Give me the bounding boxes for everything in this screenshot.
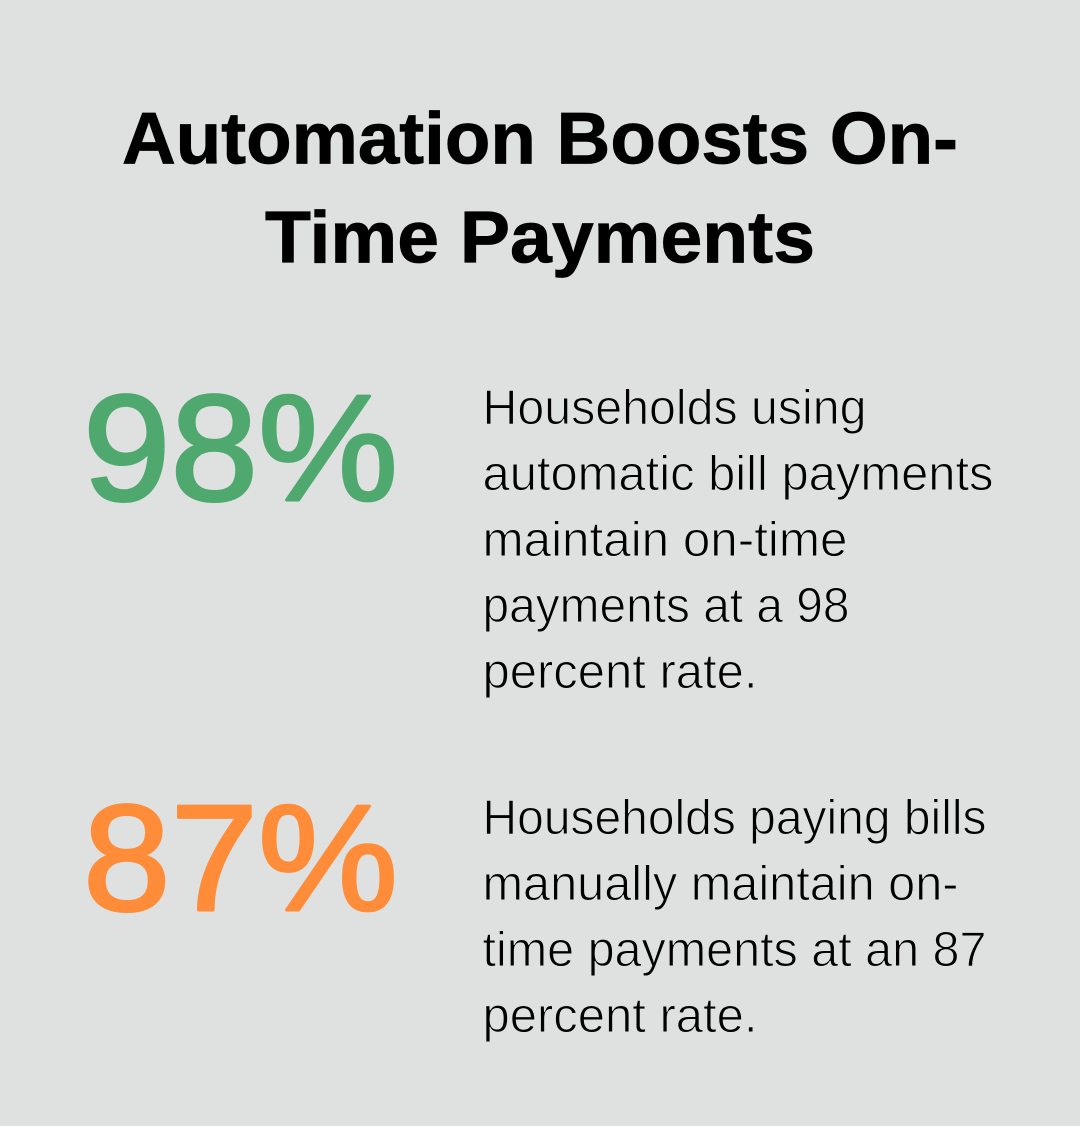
title [122, 98, 958, 278]
description: automatic payments: percent rate. [482, 645, 758, 699]
description: manual payments: time payments at an 87 [482, 923, 986, 977]
title: Automation Boosts On- [122, 98, 958, 180]
title: Time Payments [265, 198, 815, 278]
description: automatic payments: Households using [482, 381, 866, 435]
description: manual payments: percent rate. [482, 989, 758, 1043]
stat: 87%: 87% [83, 773, 398, 942]
description: automatic payments [482, 381, 994, 699]
description: manual payments: Households paying bills [482, 791, 986, 845]
description: automatic payments: maintain on-time [482, 513, 848, 567]
description: automatic payments: payments at a 98 [482, 579, 850, 633]
stat: 98%: 98% [83, 363, 398, 532]
description: manual payments: manually maintain on- [482, 857, 958, 911]
description: manual payments [482, 791, 986, 1043]
description: automatic payments: automatic bill payments [482, 447, 994, 501]
